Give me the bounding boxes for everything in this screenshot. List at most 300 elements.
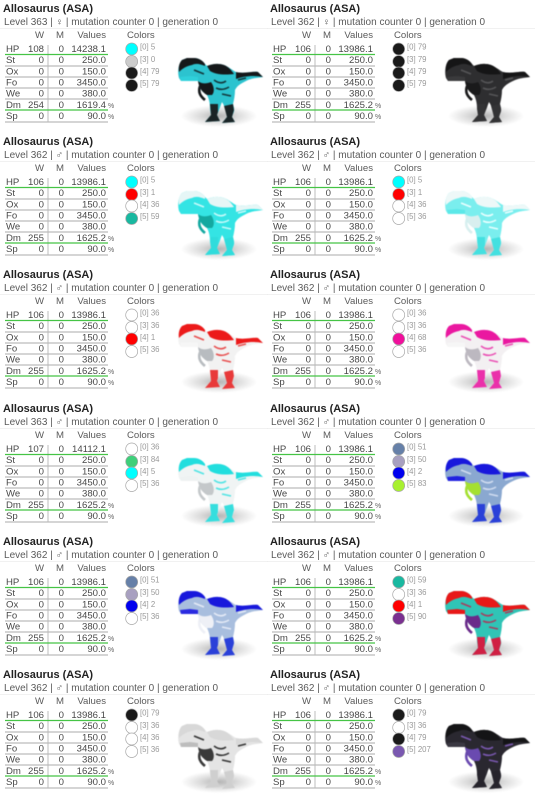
colors legend: [3] 84 — [140, 455, 160, 464]
stats table: 380.0 — [349, 222, 373, 232]
stats table: 0 — [59, 500, 64, 511]
stats table: 90.0 — [87, 511, 106, 522]
colors legend — [126, 563, 160, 624]
stats table: % — [108, 769, 114, 776]
stats table: 0 — [326, 455, 331, 466]
stats table: Values — [344, 296, 373, 307]
stats table: 0 — [39, 466, 44, 478]
stats table: 0 — [59, 577, 64, 588]
stats table: We — [6, 354, 20, 366]
colors legend: Colors — [394, 563, 422, 574]
stats table: Fo — [273, 210, 284, 222]
stats table: 0 — [326, 644, 331, 655]
colors legend: [3] 36 — [140, 321, 160, 330]
stats table: 1625.2 — [344, 633, 373, 644]
stats table: 255 — [28, 766, 44, 777]
stats table: 0 — [59, 366, 64, 377]
stats table: 3450.0 — [77, 78, 106, 88]
stats table: 106 — [295, 44, 311, 55]
stats table: Dm — [6, 366, 21, 377]
stats table: Dm — [6, 100, 21, 111]
colors legend: [5] 207 — [407, 745, 431, 754]
stats table: 0 — [59, 777, 64, 788]
dinosaur: pink on white — [445, 324, 530, 393]
stats table: We — [273, 622, 287, 632]
stats table: 0 — [59, 44, 64, 55]
stats table: % — [108, 247, 114, 254]
stats table: W — [302, 30, 312, 41]
colors legend: [0] 59 — [407, 576, 427, 584]
stats table: 0 — [39, 111, 44, 122]
stats table: 0 — [59, 66, 64, 78]
stats table: St — [273, 321, 282, 332]
stats table: Sp — [273, 244, 285, 255]
stats table: HP — [6, 177, 19, 188]
stats table: 0 — [326, 366, 331, 377]
stats table: 0 — [306, 377, 311, 388]
stats table: 255 — [295, 766, 311, 777]
stats table: 0 — [59, 188, 64, 199]
stats table: 250.0 — [349, 188, 373, 199]
title: Allosaurus (ASA) — [3, 136, 93, 148]
colors legend: Colors — [394, 163, 422, 174]
colors legend: [4] 36 — [140, 200, 160, 209]
level line: Level 362 | ♀ | mutation counter 0 | generation 0 — [271, 17, 485, 28]
colors legend: [5] 36 — [140, 612, 160, 621]
stats table: 3450.0 — [344, 744, 373, 754]
stats table: 0 — [59, 466, 64, 478]
stats table: M — [56, 296, 64, 307]
stats table: 0 — [306, 354, 311, 366]
stats table: Fo — [273, 344, 284, 354]
stats table: 0 — [59, 222, 64, 232]
stats table: Sp — [6, 511, 18, 522]
stats table: 0 — [39, 244, 44, 255]
stats table: M — [56, 430, 64, 441]
stats table: Sp — [6, 377, 18, 388]
colors legend: [3] 1 — [140, 188, 155, 197]
stats table — [6, 163, 114, 255]
stats table: Sp — [273, 377, 285, 388]
stats table: Dm — [273, 366, 288, 377]
colors legend: [5] 79 — [407, 79, 427, 88]
stats table: 0 — [59, 721, 64, 732]
colors legend: Colors — [127, 430, 155, 441]
colors legend: [4] 2 — [140, 600, 155, 609]
stats table: 0 — [39, 354, 44, 366]
stats table: 0 — [39, 511, 44, 522]
stats table: 150.0 — [82, 200, 106, 210]
stats table: W — [302, 163, 312, 174]
stats table: 13986.1 — [338, 577, 373, 588]
stats table: 106 — [28, 310, 44, 321]
stats table: % — [375, 503, 381, 510]
stats table: 3450.0 — [77, 744, 106, 754]
stats table: St — [273, 588, 282, 599]
panel: allosaurus male red on white — [0, 269, 268, 393]
colors legend: [4] 79 — [407, 733, 427, 742]
stats table: 0 — [39, 478, 44, 488]
stats table: Sp — [6, 111, 18, 122]
stats table: 0 — [326, 332, 331, 344]
stats table: 250.0 — [82, 188, 106, 199]
stats table: Sp — [6, 644, 18, 655]
level line: Level 362 | ♂ | mutation counter 0 | generation 0 — [4, 150, 218, 161]
stats table: 0 — [306, 466, 311, 478]
stats table: 90.0 — [354, 777, 373, 788]
stats table: 0 — [306, 55, 311, 66]
colors legend: [0] 79 — [407, 708, 427, 718]
stats table: HP — [273, 310, 286, 321]
stats table: Values — [344, 163, 373, 174]
stats table: 0 — [306, 732, 311, 744]
stats table: Values — [77, 430, 106, 441]
stats table: 380.0 — [82, 88, 106, 100]
stats table: 106 — [295, 310, 311, 321]
stats table: 0 — [39, 588, 44, 599]
stats table: 108 — [28, 44, 44, 55]
stats table: 150.0 — [349, 200, 373, 210]
colors legend: [5] 90 — [407, 612, 427, 621]
stats table: Dm — [273, 100, 288, 111]
stats table: Fo — [6, 78, 17, 88]
stats table: 0 — [39, 332, 44, 344]
stats table: 0 — [326, 44, 331, 55]
stats table: M — [56, 563, 64, 574]
stats table: 0 — [39, 488, 44, 500]
stats table: We — [273, 222, 287, 232]
stats table: Fo — [6, 210, 17, 222]
stats table: 250.0 — [349, 321, 373, 332]
colors legend: Colors — [127, 30, 155, 41]
colors legend — [393, 296, 427, 358]
colors legend — [126, 430, 160, 492]
colors legend: [0] 5 — [407, 176, 423, 184]
stats table: Sp — [273, 644, 285, 655]
stats table: 107 — [28, 444, 44, 455]
colors legend: [0] 36 — [407, 308, 427, 318]
stats table: We — [6, 88, 20, 100]
stats table: Fo — [6, 478, 17, 488]
stats table: 1619.4 — [77, 100, 107, 111]
stats table: % — [375, 247, 381, 254]
stats table: Values — [77, 296, 106, 307]
stats table: % — [108, 514, 114, 521]
stats table: 0 — [326, 321, 331, 332]
colors legend: [3] 36 — [407, 588, 427, 597]
colors legend: [4] 36 — [407, 200, 427, 209]
stats table: 0 — [39, 210, 44, 222]
stats table: 0 — [306, 478, 311, 488]
stats table: HP — [6, 310, 19, 321]
stats table: Values — [77, 30, 106, 41]
stats table: 0 — [306, 321, 311, 332]
stats table: Dm — [6, 500, 21, 511]
stats table: 0 — [39, 600, 44, 610]
colors legend: [0] 5 — [140, 176, 156, 184]
stats table: 0 — [326, 354, 331, 366]
colors legend: [5] 36 — [407, 345, 427, 354]
stats table: Sp — [273, 511, 285, 522]
stats table: 0 — [306, 78, 311, 88]
level line: Level 362 | ♂ | mutation counter 0 | generation 0 — [271, 417, 485, 428]
stats table: 106 — [28, 710, 44, 721]
stats table: Values — [344, 430, 373, 441]
stats table: % — [375, 103, 381, 110]
stats table: 0 — [59, 100, 64, 111]
stats table: 0 — [326, 88, 331, 100]
title: Allosaurus (ASA) — [270, 136, 360, 148]
stats table: 255 — [28, 233, 44, 244]
stats table: 255 — [295, 500, 311, 511]
stats table: 0 — [326, 377, 331, 388]
stats table: 0 — [59, 766, 64, 777]
stats table — [6, 296, 114, 388]
stats table: 0 — [59, 310, 64, 321]
stats table: 90.0 — [87, 644, 106, 655]
colors legend: [5] 36 — [140, 479, 160, 488]
stats table: 106 — [295, 577, 311, 588]
stats table: 0 — [39, 455, 44, 466]
stats table: 380.0 — [82, 488, 106, 500]
stats table: 0 — [39, 321, 44, 332]
stats table: Ox — [273, 332, 285, 344]
stats table: 0 — [59, 321, 64, 332]
stats table: Dm — [273, 500, 288, 511]
colors legend: [4] 2 — [407, 467, 422, 476]
colors legend: [4] 36 — [140, 733, 160, 742]
stats table: 0 — [39, 732, 44, 744]
stats table: % — [375, 780, 381, 787]
colors legend: [5] 59 — [140, 212, 160, 221]
colors legend: Colors — [394, 430, 422, 441]
stats table: 1625.2 — [77, 366, 106, 377]
stats table: We — [273, 488, 287, 500]
stats table: 3450.0 — [77, 344, 106, 354]
stats table: We — [273, 88, 287, 100]
stats table: % — [108, 114, 114, 121]
stats table: % — [108, 369, 114, 376]
stats table: 0 — [39, 200, 44, 210]
stats table: 0 — [306, 188, 311, 199]
stats table: 106 — [28, 177, 44, 188]
stats table: 0 — [59, 710, 64, 721]
stats table: 0 — [39, 377, 44, 388]
stats table: 13986.1 — [338, 710, 373, 721]
level line: Level 363 | ♀ | mutation counter 0 | generation 0 — [4, 17, 218, 28]
colors legend — [393, 163, 427, 224]
colors legend: [0] 5 — [140, 42, 156, 52]
colors legend: [5] 36 — [407, 212, 427, 221]
stats table: 254 — [28, 100, 45, 111]
stats table: Ox — [273, 66, 285, 78]
stats table: 0 — [326, 577, 331, 588]
stats table: 380.0 — [82, 354, 106, 366]
level line: Level 362 | ♂ | mutation counter 0 | generation 0 — [4, 683, 218, 694]
stats table: St — [6, 55, 15, 66]
stats table: Ox — [273, 200, 285, 210]
stats table: 0 — [306, 111, 311, 122]
stats table: 13986.1 — [338, 310, 373, 321]
stats table: We — [6, 488, 20, 500]
stats table: 150.0 — [82, 332, 106, 344]
stats table: Ox — [6, 332, 18, 344]
stats table: 150.0 — [82, 66, 106, 78]
stats table: 0 — [326, 610, 331, 622]
colors legend: [4] 1 — [140, 333, 155, 342]
stats table: Fo — [273, 744, 284, 754]
stats table: Values — [77, 696, 106, 707]
stats table: We — [273, 754, 287, 766]
stats table: 0 — [326, 222, 331, 232]
colors legend: [5] 83 — [407, 479, 427, 488]
stats table: 0 — [326, 710, 331, 721]
stats table: Dm — [273, 233, 288, 244]
stats table: St — [6, 321, 15, 332]
stats table: 1625.2 — [344, 100, 373, 111]
stats table: 3450.0 — [344, 478, 373, 488]
stats table: 90.0 — [354, 511, 373, 522]
colors legend: [4] 68 — [407, 333, 427, 342]
stats table: St — [273, 721, 282, 732]
stats table: W — [35, 563, 45, 574]
stats table: 0 — [326, 744, 331, 754]
panel: allosaurus female cyan level 363 — [0, 3, 268, 127]
stats table: 255 — [28, 633, 44, 644]
title: Allosaurus (ASA) — [270, 536, 360, 548]
stats table: 1625.2 — [77, 766, 106, 777]
colors legend: Colors — [127, 696, 155, 707]
stats table: 0 — [326, 244, 331, 255]
stats table: 0 — [326, 100, 331, 111]
dinosaur: red, teal and purple — [445, 591, 530, 660]
stats table: We — [6, 222, 20, 232]
stats table: 1625.2 — [344, 366, 373, 377]
stats table: 150.0 — [82, 600, 106, 610]
title: Allosaurus (ASA) — [270, 269, 360, 281]
stats table: 0 — [59, 732, 64, 744]
colors legend — [393, 696, 431, 758]
stats table: W — [35, 696, 45, 707]
stats table: Values — [344, 696, 373, 707]
title: Allosaurus (ASA) — [270, 669, 360, 681]
stats table: 0 — [326, 732, 331, 744]
stats table: 3450.0 — [344, 78, 373, 88]
colors legend: Colors — [127, 563, 155, 574]
colors legend: [5] 36 — [140, 345, 160, 354]
stats table: HP — [273, 177, 286, 188]
dinosaur: red on white — [178, 324, 263, 393]
stats table: 0 — [306, 754, 311, 766]
stats table: 0 — [59, 177, 64, 188]
stats table: 0 — [59, 200, 64, 210]
stats table: 0 — [326, 478, 331, 488]
stats table: 13986.1 — [338, 44, 373, 55]
stats table: Sp — [273, 777, 285, 788]
stats table: 255 — [28, 366, 44, 377]
stats table: 250.0 — [349, 455, 373, 466]
stats table: 0 — [326, 754, 331, 766]
panel: allosaurus male black and purple — [267, 669, 535, 793]
colors legend: [0] 51 — [140, 576, 160, 584]
stats table: 90.0 — [87, 111, 106, 122]
stats table: 0 — [39, 222, 44, 232]
colors legend: Colors — [394, 696, 422, 707]
colors legend: [0] 36 — [140, 442, 160, 452]
stats table — [273, 30, 381, 122]
stats table: St — [6, 721, 15, 732]
stats table: 3450.0 — [344, 344, 373, 354]
colors legend: Colors — [127, 296, 155, 307]
stats table: 1625.2 — [344, 500, 373, 511]
stats table: 0 — [326, 111, 331, 122]
dinosaur: cyan and black — [178, 58, 263, 127]
stats table: 380.0 — [82, 754, 106, 766]
stats table: 0 — [59, 332, 64, 344]
colors legend: [0] 51 — [407, 442, 427, 452]
stats table: 0 — [326, 766, 331, 777]
stats table: 0 — [59, 377, 64, 388]
colors legend: [0] 79 — [407, 42, 427, 52]
stats table: % — [375, 636, 381, 643]
colors legend: [4] 1 — [407, 600, 422, 609]
stats table: 0 — [306, 488, 311, 500]
stats table: W — [35, 163, 45, 174]
stats table: 0 — [306, 332, 311, 344]
stats table: Sp — [273, 111, 285, 122]
stats table: 90.0 — [354, 644, 373, 655]
stats table: 250.0 — [349, 721, 373, 732]
stats table: 0 — [59, 455, 64, 466]
stats table: % — [108, 780, 114, 787]
stats table: 0 — [326, 600, 331, 610]
stats table: We — [6, 622, 20, 632]
stats table: 0 — [326, 188, 331, 199]
stats table: % — [375, 114, 381, 121]
stats table: Values — [344, 30, 373, 41]
stats table: 0 — [306, 511, 311, 522]
stats table: 3450.0 — [77, 210, 106, 222]
stats table: % — [108, 380, 114, 387]
stats table — [6, 30, 114, 122]
panel: allosaurus male cyan with teal — [0, 136, 268, 260]
stats table: M — [56, 696, 64, 707]
stats table: % — [375, 769, 381, 776]
stats table: 0 — [326, 500, 331, 511]
title: Allosaurus (ASA) — [3, 403, 93, 415]
stats table: 0 — [306, 455, 311, 466]
stats table: 0 — [39, 721, 44, 732]
colors legend — [126, 696, 160, 758]
stats table: 0 — [59, 244, 64, 255]
stats table: % — [375, 514, 381, 521]
stats table: 0 — [39, 610, 44, 622]
panel: allosaurus male red, teal and purple — [267, 536, 535, 660]
stats table: St — [273, 455, 282, 466]
colors legend: Colors — [127, 163, 155, 174]
panel: allosaurus female black level 362 — [267, 3, 535, 127]
stats table: HP — [273, 44, 286, 55]
stats table: 0 — [39, 344, 44, 354]
title: Allosaurus (ASA) — [270, 3, 360, 15]
stats table: 150.0 — [349, 732, 373, 744]
stats table — [6, 696, 114, 788]
stats table: % — [108, 647, 114, 654]
stats table: 150.0 — [82, 732, 106, 744]
stats table: 0 — [306, 588, 311, 599]
level line: Level 362 | ♂ | mutation counter 0 | generation 0 — [271, 683, 485, 694]
title: Allosaurus (ASA) — [3, 536, 93, 548]
